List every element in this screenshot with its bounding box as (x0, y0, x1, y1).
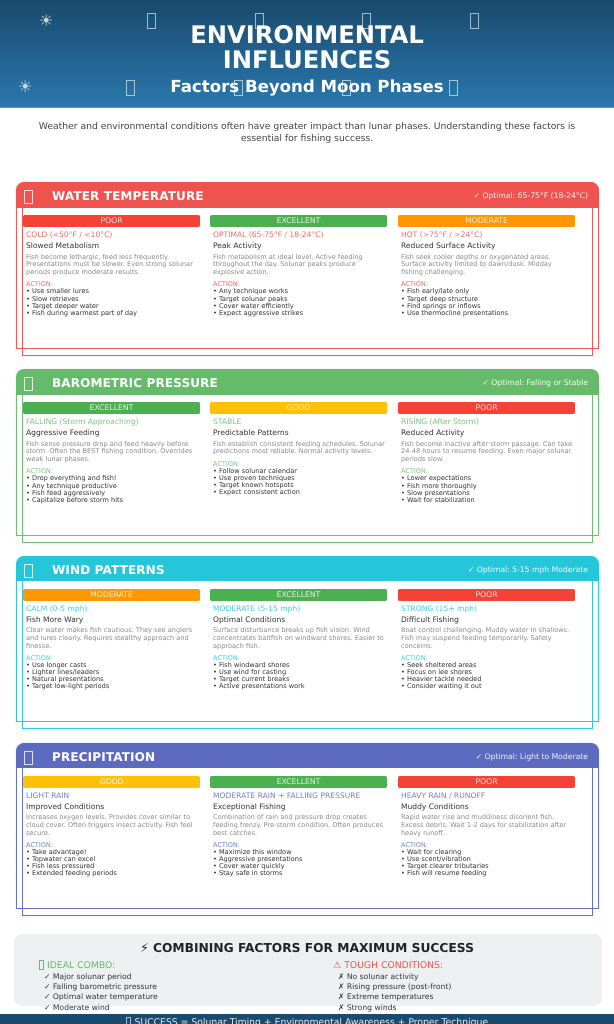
column: strong: ACTION: (401, 654, 428, 662)
column: rising: • Slow presentations (401, 489, 470, 497)
tough conditions list: ✗ Strong winds (338, 1003, 396, 1012)
icon: missing glyph bottom 4 (449, 80, 458, 96)
column: hot: • Find springs or inflows (401, 302, 481, 310)
column: moderate rain: MODERATE RAIN + FALLING PRESSURE (213, 790, 360, 800)
icon: missing glyph top 3 (362, 13, 371, 29)
column: moderate rain: Exceptional Fishing (213, 802, 286, 810)
column: moderate: • Fish windward shores (213, 661, 289, 669)
ideal combo list: ✓ Optimal water temperature (44, 992, 158, 1001)
column: cold: • Fish during warmest part of day (26, 309, 137, 317)
column: strong: • Heavier tackle needed (401, 675, 481, 683)
panel heading: WATER TEMPERATURE (52, 189, 204, 203)
column: hot: Reduced Surface Activity (401, 241, 495, 250)
column: rising: POOR (475, 403, 498, 412)
column: stable (210, 402, 387, 496)
column: strong: STRONG (15+ mph) (401, 604, 477, 612)
column: hot: HOT (>75°F / >24°C) (401, 230, 482, 239)
optimal range: ✓ Optimal: Falling or Stable (482, 378, 588, 387)
icon: missing glyph top 4 (470, 13, 478, 29)
column: falling: Aggressive Feeding (26, 428, 99, 437)
column: moderate rain: • Maximize this window (213, 848, 291, 856)
optimal range: ✓ Optimal: 5-15 mph Moderate (468, 564, 588, 574)
column: light rain: • Topwater can excel (26, 855, 95, 863)
icon: missing glyph bottom 2 (234, 80, 242, 96)
column: cold (23, 215, 200, 317)
column: moderate rain: feeding frenzy. Pre-storm condition. Often produces (213, 821, 383, 829)
icon: wind (24, 564, 32, 578)
column: cold: periods produce moderate results. (26, 268, 140, 276)
panel header (16, 556, 599, 581)
icon: rain (24, 750, 32, 764)
column: calm: MODERATE (90, 590, 133, 598)
column: optimal (210, 215, 387, 317)
column: moderate: • Use wind for casting (213, 668, 286, 676)
icon: sun top row: ☀ (39, 11, 53, 30)
column: moderate: ACTION: (213, 654, 240, 662)
icon: missing glyph top 1 (147, 13, 156, 29)
column: cold: Presentations must be slower. Even strong solunar (26, 260, 193, 268)
column: calm: • Use longer casts (26, 661, 87, 669)
column: moderate: EXCELLENT (277, 590, 320, 598)
subtitle: Factors Beyond Moon Phases (170, 77, 444, 96)
panel header (16, 742, 599, 768)
tough conditions list: ✗ Rising pressure (post-front) (338, 982, 451, 991)
column: light rain: cloud cover. Often triggers insect activity. Fish feel (26, 821, 192, 829)
column: hot: MODERATE (465, 216, 508, 225)
column: moderate rain: • Aggressive presentations (213, 855, 302, 863)
column: stable: • Follow solunar calendar (213, 467, 297, 475)
column: optimal: • Any technique works (213, 287, 288, 295)
column: heavy rain: ACTION: (401, 841, 428, 849)
column: optimal: • Cover water efficiently (213, 302, 294, 310)
column: stable: • Target known hotspots (213, 481, 294, 489)
outline (16, 768, 599, 909)
column: falling: storm. Often the BEST fishing condition. Overrides (26, 447, 192, 455)
column: cold: • Slow retrieves (26, 294, 79, 302)
column: optimal: ACTION: (213, 280, 240, 288)
column: moderate: concentrates baitfish on windward shores. Easier to (213, 634, 384, 642)
column: strong (398, 589, 575, 690)
column: heavy rain: Muddy Conditions (401, 802, 469, 810)
column: calm: ACTION: (26, 654, 53, 662)
column: stable: ACTION: (213, 460, 240, 468)
column: calm (23, 589, 200, 690)
column: falling: Fish sense pressure drop and feed heavily before (26, 440, 188, 448)
column: strong: concerns. (401, 642, 433, 650)
column: light rain: • Fish less pressured (26, 862, 94, 870)
outline (16, 207, 599, 348)
column: moderate: Surface disturbance breaks up fish vision. Wind (213, 626, 370, 634)
column: cold: Fish become lethargic, feed less frequently. (26, 253, 169, 261)
column: heavy rain: • Wait for clearing (401, 848, 461, 856)
icon: missing glyph top 2 (254, 13, 264, 29)
column: stable: • Expect consistent action (213, 488, 300, 496)
icon: missing glyph bottom 1 (126, 80, 135, 96)
column: calm: and lures clearly. Requires stealthy approach and (26, 634, 189, 642)
tough conditions heading: ⚠ TOUGH CONDITIONS: (333, 960, 443, 970)
column: moderate rain: Combination of rain and pressure drop creates (213, 813, 367, 821)
column: strong: • Focus on lee shores (401, 668, 472, 676)
outline (16, 580, 599, 722)
column: optimal: Fish metabolism at ideal level. Active feeding (213, 253, 363, 261)
column: falling: FALLING (Storm Approaching) (26, 417, 139, 426)
icon: gauge (24, 377, 32, 391)
column: hot: Surface activity limited to dawn/dusk. Midday (401, 260, 552, 268)
column: optimal: Peak Activity (213, 241, 262, 250)
column: falling: weak lunar phases. (26, 455, 90, 463)
column: falling: ACTION: (26, 467, 53, 475)
column: cold: • Target deeper water (26, 302, 99, 310)
column: cold: Slowed Metabolism (26, 241, 99, 250)
column: hot: • Fish early/late only (401, 287, 469, 295)
column: hot: Fish seek cooler depths or oxygenated areas. (401, 253, 551, 261)
column: moderate rain: best catches. (213, 828, 257, 836)
column: cold: ACTION: (26, 280, 53, 288)
column: optimal: OPTIMAL (65-75°F / 18-24°C) (213, 230, 324, 239)
title line 2: INFLUENCES (223, 46, 391, 74)
panel: water temperature (16, 182, 599, 356)
column: rising: Reduced Activity (401, 428, 464, 437)
header banner (0, 0, 614, 108)
column: light rain (23, 776, 200, 877)
column: heavy rain: HEAVY RAIN / RUNOFF (401, 790, 485, 800)
column: stable: • Use proven techniques (213, 474, 295, 482)
column: hot (398, 215, 575, 317)
column: rising: ACTION: (401, 467, 428, 475)
column: moderate rain: EXCELLENT (277, 776, 320, 786)
column: strong: Boat control challenging. Muddy water in shallows. (401, 626, 569, 634)
column: calm: Clear water makes fish cautious. They see anglers (26, 626, 192, 634)
column: rising: • Lower expectations (401, 474, 471, 482)
panel: precipitation (16, 742, 599, 916)
column: moderate rain (210, 776, 387, 877)
column: rising (398, 402, 575, 504)
column: moderate rain: • Stay safe in storms (213, 869, 282, 877)
column: falling: EXCELLENT (90, 403, 133, 412)
column: optimal: explosive action. (213, 268, 269, 276)
column: strong: Difficult Fishing (401, 614, 459, 624)
column: moderate (210, 589, 387, 690)
column: light rain: GOOD (100, 776, 123, 786)
column: optimal: • Expect aggressive strikes (213, 309, 303, 317)
panel header (16, 182, 599, 208)
column: moderate: MODERATE (5-15 mph) (213, 604, 300, 612)
column: strong: • Consider waiting it out (401, 682, 482, 690)
column: falling: • Any technique productive (26, 482, 117, 490)
column: hot: • Target deep structure (401, 294, 478, 302)
column: calm: • Lighter lines/leaders (26, 668, 99, 676)
column: heavy rain: Rapid water rise and muddiness disorient fish. (401, 813, 554, 821)
column: moderate: approach fish. (213, 642, 260, 650)
panel: barometric pressure (16, 369, 599, 543)
optimal range: ✓ Optimal: 65-75°F (18-24°C) (474, 191, 588, 200)
icon: sun bottom row: ☀ (18, 77, 32, 96)
panel heading: PRECIPITATION (52, 750, 155, 764)
column: calm: • Target low-light periods (26, 682, 109, 690)
title line 1: ENVIRONMENTAL (190, 21, 424, 49)
column: optimal: throughout the day. Solunar peaks produce (213, 260, 356, 268)
column: heavy rain: heavy runoff. (401, 828, 445, 836)
column: calm: • Natural presentations (26, 675, 104, 683)
column: moderate: • Target current breaks (213, 675, 289, 683)
ideal combo list: ✓ Falling barometric pressure (44, 982, 157, 991)
column: heavy rain: • Fish will resume feeding (401, 869, 486, 877)
tough conditions list (338, 972, 451, 1012)
column: light rain: Increases oxygen levels. Provides cover similar to (26, 813, 190, 821)
column: optimal: EXCELLENT (277, 216, 320, 225)
column: heavy rain: Excess debris. Wait 1-2 days for stabilization after (401, 821, 566, 829)
column: light rain: • Extended feeding periods (26, 869, 117, 877)
column: calm: CALM (0-5 mph) (26, 604, 87, 612)
column: falling: • Capitalize before storm hits (26, 496, 123, 504)
intro text: Weather and environmental conditions often have greater impact than lunar phases. Understanding these factors is essential for fishing success. (39, 120, 575, 144)
column: cold: • Use smaller lures (26, 287, 89, 295)
panel: combining factors (14, 934, 602, 1006)
column: strong: • Seek sheltered areas (401, 661, 476, 669)
column: strong: Fish may suspend feeding temporarily. Safety (401, 634, 552, 642)
column: heavy rain: • Target clearer tributaries (401, 862, 489, 870)
column: moderate rain: • Cover water quickly (213, 862, 285, 870)
column: rising: 24-48 hours to resume feeding. Even major solunar (401, 447, 571, 455)
column: rising: Fish become inactive after storm passage. Can take (401, 440, 572, 448)
tough conditions list: ✗ No solunar activity (338, 972, 419, 980)
column: light rain: • Take advantage! (26, 848, 87, 856)
column: falling: • Fish feed aggressively (26, 489, 105, 497)
column: hot: • Use thermocline presentations (401, 309, 508, 317)
column: stable: GOOD (286, 403, 310, 412)
column: falling: • Drop everything and fish! (26, 474, 117, 482)
column: cold: COLD (<50°F / <10°C) (26, 230, 112, 239)
column: stable: Predictable Patterns (213, 428, 289, 437)
column: falling (23, 402, 200, 504)
column: hot: fishing challenging. (401, 268, 465, 276)
outline (16, 394, 599, 536)
column: optimal: • Target solunar peaks (213, 294, 288, 302)
combining factors heading: ⚡ COMBINING FACTORS FOR MAXIMUM SUCCESS (140, 941, 474, 955)
column: hot: ACTION: (401, 280, 428, 288)
footer banner (0, 1014, 614, 1024)
column: stable: predictions most reliable. Normal activity levels. (213, 447, 372, 455)
panel header (16, 369, 599, 394)
column: cold: POOR (100, 216, 123, 225)
panel: wind patterns (16, 556, 599, 730)
column: stable: Fish establish consistent feeding schedules. Solunar (213, 440, 385, 448)
tough conditions list: ✗ Extreme temperatures (338, 992, 433, 1001)
column: light rain: Improved Conditions (26, 802, 104, 810)
column: rising: • Wait for stabilization (401, 496, 475, 504)
column: moderate rain: ACTION: (213, 841, 240, 849)
ideal combo list (44, 972, 158, 1012)
column: heavy rain: POOR (475, 776, 498, 786)
column: calm: Fish More Wary (26, 614, 83, 624)
icon: missing glyph bottom 3 (342, 80, 350, 96)
column: light rain: LIGHT RAIN (26, 790, 69, 800)
ideal combo list: ✓ Moderate wind (44, 1003, 110, 1012)
panel heading: WIND PATTERNS (52, 562, 165, 576)
column: moderate: Optimal Conditions (213, 614, 285, 624)
column: moderate: • Active presentations work (213, 682, 305, 690)
column: light rain: ACTION: (26, 841, 53, 849)
column: heavy rain: • Use scent/vibration (401, 855, 471, 863)
column: strong: POOR (475, 590, 498, 598)
column: light rain: secure. (26, 828, 50, 836)
column: rising: RISING (After Storm) (401, 417, 479, 426)
ideal combo list: ✓ Major solunar period (44, 972, 132, 980)
optimal range: ✓ Optimal: Light to Moderate (476, 752, 588, 760)
icon: thermometer (24, 190, 32, 204)
column: calm: finesse. (26, 642, 51, 650)
column: heavy rain (398, 776, 575, 877)
panel heading: BAROMETRIC PRESSURE (52, 376, 218, 390)
column: rising: periods slow. (401, 455, 444, 463)
column: rising: • Fish more thoroughly (401, 482, 477, 490)
ideal combo heading: IDEAL COMBO: (47, 960, 115, 970)
column: stable: STABLE (213, 417, 241, 426)
